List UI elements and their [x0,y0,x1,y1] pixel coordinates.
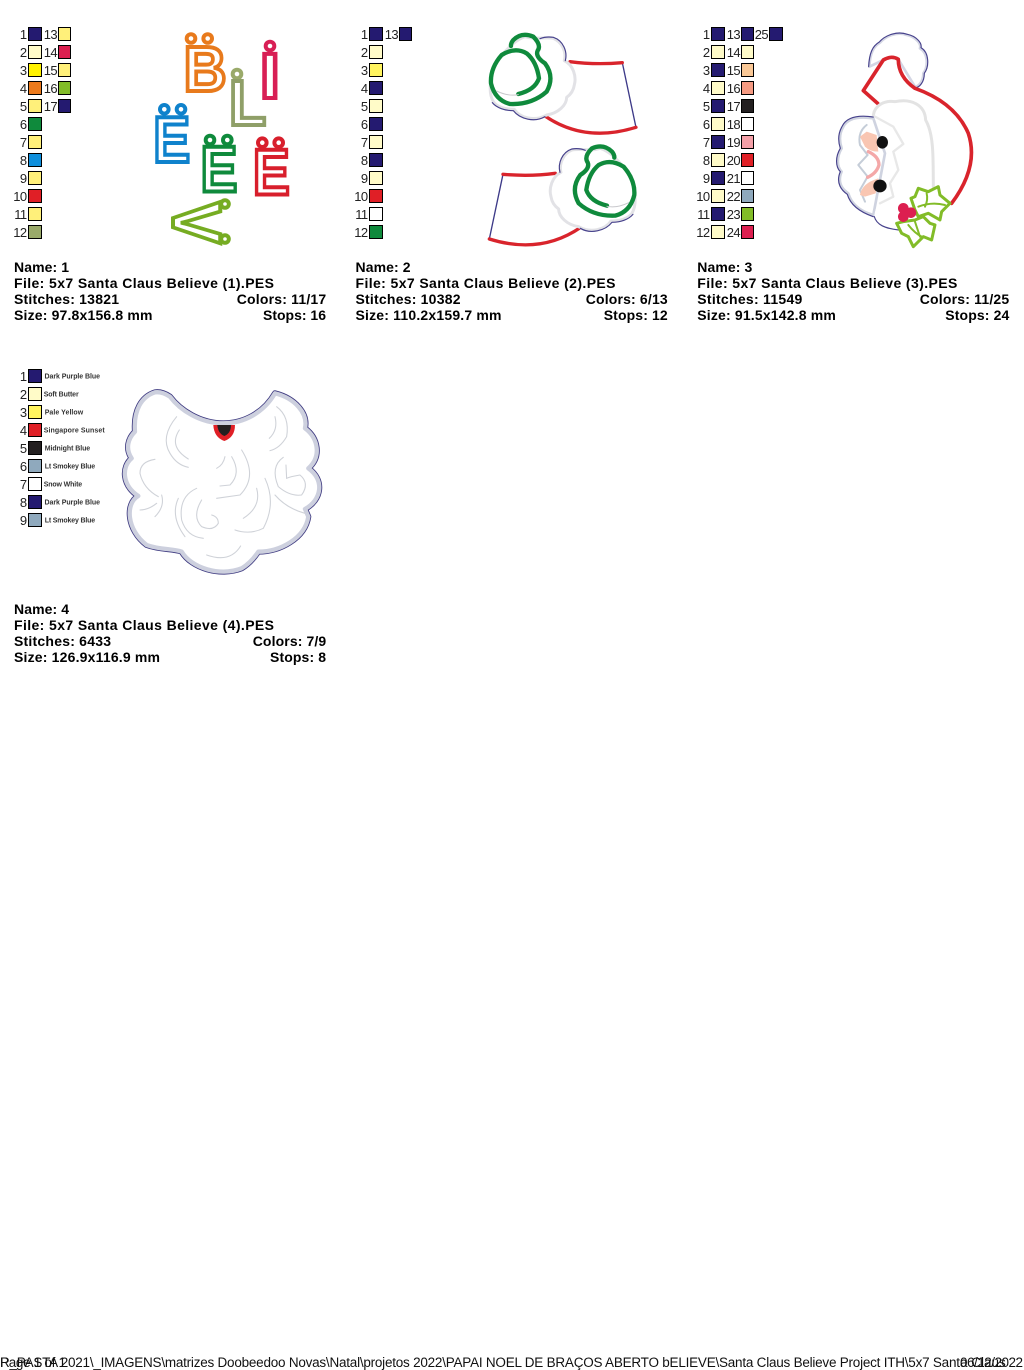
footer: overlapping page number, file path and date: Page 1 of 1 [0,1355,66,1370]
legend: design 1 colour list: 12 [13,225,27,240]
info block: design 2: Colors: 6/13 [586,291,668,307]
legend: design 1 colour list: 7 [20,135,27,150]
legend: design 2 colour list: 5 [361,99,368,114]
info block: design 2: Stops: 12 [604,307,668,323]
legend: design 1 colour list: 11 [14,207,27,222]
info block: design 4: Stitches: 6433 [14,633,111,649]
fur brim [873,101,933,230]
legend: design 1 colour list: 1 [20,27,27,42]
legend: design 1 colour list: 2 [20,45,27,60]
info block: design 4 [14,601,326,665]
eyes [877,136,888,149]
panel: design 3 [696,27,1010,323]
legend: design 4 colour list with thread names: Singapore Sunset [44,428,105,434]
pom-pom [869,34,927,87]
info block: design 3: File: 5x7 Santa Claus Believe (3).PES [697,275,957,291]
panel: design 4 [14,369,326,665]
legend: design 3 colour list: 25 [755,27,768,42]
legend: design 1 colour list: 10 [13,189,27,204]
legend: design 1 colour list: 5 [20,99,27,114]
info block: design 3: Stops: 24 [945,307,1010,323]
legend: design 3 colour list: 16 [727,81,740,96]
embroidery: BELIEVE letters: E [253,135,290,209]
info block: design 1: Stops: 16 [263,307,326,323]
info block: design 1 [14,259,326,323]
legend: design 3 colour list: 14 [727,45,740,60]
legend: design 4 colour list with thread names: 6 [20,459,27,474]
info block: design 2 [356,259,668,323]
info block: design 3: Size: 91.5x142.8 mm [697,307,836,323]
legend: design 3 colour list: 20 [727,153,740,168]
legend: design 4 colour list with thread names: Lt Smokey Blue [45,464,95,470]
legend: design 3 colour list: 17 [727,99,740,114]
legend: design 2 colour list: 9 [361,171,368,186]
legend: design 1 colour list: 3 [20,63,27,78]
legend: design 4 colour list with thread names: 7 [20,477,27,492]
info block: design 1: Stitches: 13821 [14,291,119,307]
info block: design 3 [697,259,1010,323]
info block: design 4: Stops: 8 [270,649,326,665]
embroidery: Santa beard [125,392,319,572]
legend: design 4 colour list with thread names [20,369,105,528]
legend: design 3 colour list: 9 [703,171,710,186]
legend: design 4 colour list with thread names: Pale Yellow [45,410,84,416]
legend: design 3 colour list: 23 [727,207,740,222]
holly leaves [911,187,950,220]
hat outline [863,57,971,203]
legend: design 2 colour list: 8 [361,153,368,168]
embroidery: Santa head [837,33,971,247]
footer: overlapping page number, file path and date: 06/12/2022 [960,1355,1023,1370]
berries [898,203,916,222]
legend: design 2 colour list: 6 [361,117,368,132]
left hair [838,117,885,215]
legend: design 4 colour list with thread names: 3 [20,405,27,420]
legend: design 3 colour list: 13 [727,27,740,42]
legend: design 3 colour list: 6 [703,117,710,132]
embroidery: BELIEVE letters: V [157,202,234,244]
footer: overlapping page number, file path and date: R_PASTA 2021\_IMAGENS\matrizes Doobeedoo Novas\Natal\projetos 2022\PAPAI NOEL DE BRAÇOS ABERTO bELIEVE\Santa Claus Believe Project ITH\5x7 Sant [0,1355,960,1370]
info block: design 4: File: 5x7 Santa Claus Believe (4).PES [14,617,274,633]
beard swirl lines [140,407,305,558]
legend: design 4 colour list with thread names: 8 [20,495,27,510]
legend: design 3 colour list [696,27,782,240]
legend: design 4 colour list with thread names: Dark Purple Blue [44,374,100,380]
legend: design 3 colour list: 5 [703,99,710,114]
nose [868,152,879,177]
legend: design 1 colour list: 8 [20,153,27,168]
legend: design 1 colour list: 13 [44,27,57,42]
legend: design 2 colour list: 3 [361,63,368,78]
info block: design 2: Name: 2 [356,259,411,275]
neck opening mark [213,425,235,441]
legend: design 2 colour list: 4 [361,81,368,96]
panel: design 2 [354,27,668,323]
legend: design 2 colour list: 1 [361,27,368,42]
legend: design 3 colour list: 24 [727,225,740,240]
legend: design 3 colour list: 11 [697,207,710,222]
info block: design 1: Name: 1 [14,259,69,275]
legend: design 2 colour list: 11 [355,207,368,222]
embroidery: BELIEVE letters: E [153,103,190,176]
cheeks [860,132,878,152]
legend: design 2 colour list: 10 [354,189,368,204]
embroidery: upper arm with mitten [490,35,636,133]
legend: design 2 colour list: 12 [354,225,368,240]
embroidery: BELIEVE letters: I [260,40,280,112]
legend: design 4 colour list with thread names: 2 [20,387,27,402]
legend: design 3 colour list: 12 [696,225,710,240]
legend: design 1 colour list: 17 [44,99,57,114]
legend: design 3 colour list: 18 [727,117,740,132]
embroidery: BELIEVE letters: E [200,132,237,205]
info block: design 3: Stitches: 11549 [697,291,803,307]
legend: design 4 colour list with thread names: Midnight Blue [45,446,90,452]
legend: design 2 colour list: 7 [361,135,368,150]
info block: design 4: Size: 126.9x116.9 mm [14,649,160,665]
legend: design 1 colour list: 6 [20,117,27,132]
legend: design 4 colour list with thread names: 5 [20,441,27,456]
legend: design 1 colour list: 15 [44,63,57,78]
legend: design 4 colour list with thread names: Lt Smokey Blue [45,518,95,524]
legend: design 3 colour list: 19 [727,135,740,150]
legend: design 1 colour list [13,27,70,240]
legend: design 1 colour list: 4 [20,81,27,96]
info block: design 2: Size: 110.2x159.7 mm [356,307,502,323]
legend: design 4 colour list with thread names: 4 [20,423,27,438]
info block: design 3: Name: 3 [697,259,753,275]
info block: design 4: Colors: 7/9 [253,633,326,649]
embroidery: BELIEVE letters [153,34,290,244]
embroidery: lower arm with mitten [489,146,635,245]
legend: design 3 colour list: 21 [727,171,740,186]
legend: design 3 colour list: 7 [703,135,710,150]
legend: design 3 colour list: 2 [703,45,710,60]
info block: design 1: Colors: 11/17 [237,291,326,307]
info block: design 3: Colors: 11/25 [920,291,1009,307]
footer: overlapping page number, file path and date: a Claus [960,1355,1006,1370]
panel: design 1 [13,27,326,323]
legend: design 1 colour list: 14 [44,45,57,60]
legend: design 1 colour list: 9 [20,171,27,186]
legend: design 3 colour list: 15 [727,63,740,78]
embroidery: BELIEVE letters: L [229,68,266,139]
legend: design 4 colour list with thread names: Soft Butter [44,392,79,398]
info block: design 4: Name: 4 [14,601,69,617]
legend: design 3 colour list: 4 [703,81,710,96]
legend: design 1 colour list: 16 [44,81,57,96]
legend: design 3 colour list: 1 [703,27,710,42]
legend: design 3 colour list: 3 [703,63,710,78]
legend: design 4 colour list with thread names: Dark Purple Blue [44,500,100,506]
info block: design 2: File: 5x7 Santa Claus Believe (2).PES [356,275,616,291]
inner hair edge [858,125,868,202]
info block: design 2: Stitches: 10382 [356,291,461,307]
legend: design 3 colour list: 8 [703,153,710,168]
legend: design 4 colour list with thread names: 1 [20,369,27,384]
info block: design 1: Size: 97.8x156.8 mm [14,307,152,323]
legend: design 2 colour list: 2 [361,45,368,60]
legend: design 3 colour list: 10 [696,189,710,204]
legend: design 2 colour list: 13 [385,27,398,42]
legend: design 4 colour list with thread names: 9 [20,513,27,528]
embroidery: BELIEVE letters: B [184,34,227,105]
legend: design 2 colour list [354,27,412,240]
legend: design 4 colour list with thread names: Snow White [44,482,82,488]
info block: design 1: File: 5x7 Santa Claus Believe (1).PES [14,275,274,291]
legend: design 3 colour list: 22 [727,189,740,204]
